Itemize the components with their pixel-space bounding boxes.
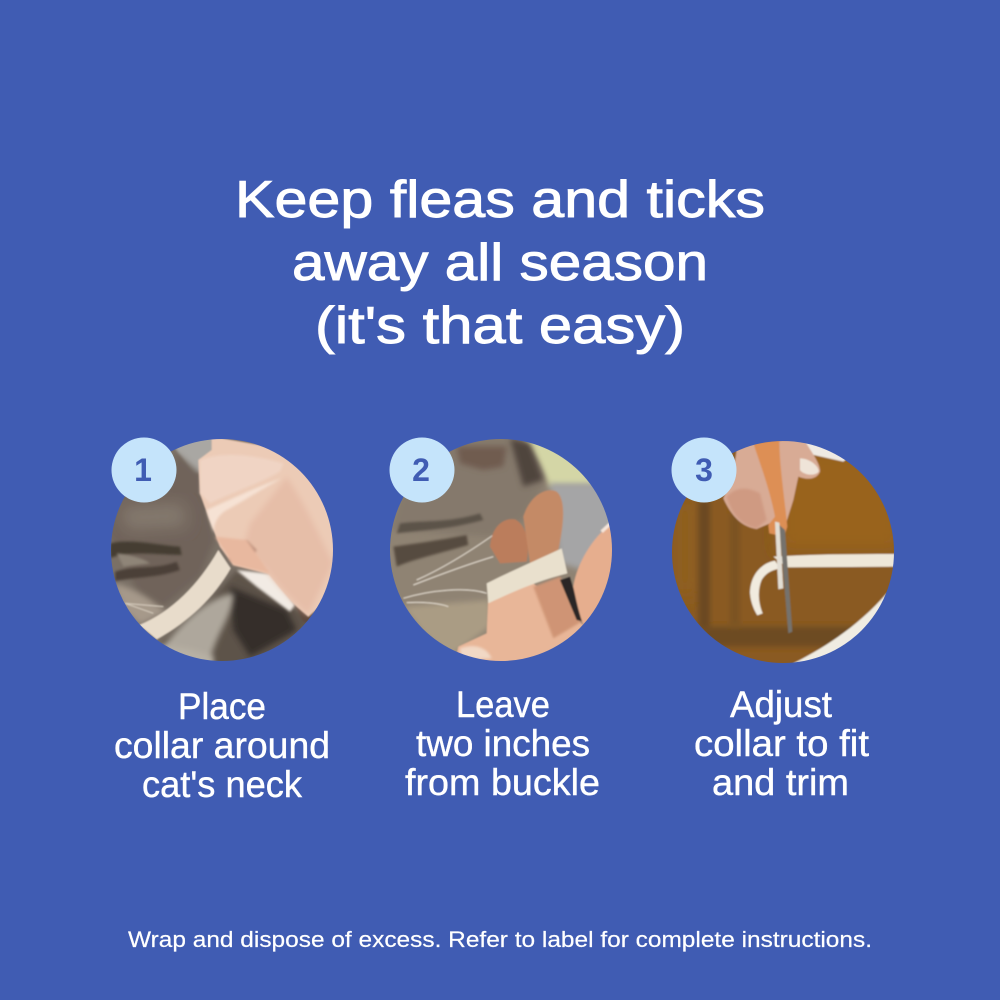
hand: [723, 438, 820, 529]
collar: [139, 550, 231, 639]
hand: [198, 437, 347, 617]
right finger: [572, 526, 612, 625]
scissors: [753, 440, 787, 537]
step 3 caption: Adjust: [730, 684, 833, 725]
black buckle: [560, 577, 583, 622]
title: (it's that easy): [315, 297, 685, 355]
badge 2: 2: [412, 452, 430, 488]
step 2 caption: two inches: [416, 723, 590, 764]
title: Keep fleas and ticks: [235, 171, 765, 229]
badge 2: [390, 438, 454, 502]
step 3 photo: scissors trimming collar: [672, 441, 894, 663]
step 1 photo: hand placing collar on cat: [111, 439, 333, 661]
step 1 caption: Place: [178, 686, 266, 727]
fingers: [490, 519, 528, 563]
title: away all season: [292, 234, 708, 292]
step 1 caption: collar around: [114, 725, 330, 766]
step 3 caption: collar to fit: [694, 723, 870, 764]
title: [235, 171, 765, 355]
badge 3: 3: [695, 452, 713, 488]
step 2 photo: fingers checking collar gap: [390, 439, 612, 661]
step 1 caption: cat's neck: [142, 764, 302, 805]
footer note: Wrap and dispose of excess. Refer to label for complete instructions.: [128, 927, 872, 952]
badge 3: [672, 438, 736, 502]
collar: [487, 548, 567, 603]
lower palm: [456, 583, 584, 661]
collar band: [773, 554, 900, 567]
step 2 caption: Leave: [456, 684, 550, 725]
step 2 caption: from buckle: [405, 762, 600, 803]
badge 1: [112, 438, 176, 502]
step 3 caption: [694, 684, 870, 803]
whiskers: [403, 535, 493, 607]
badge 1: 1: [134, 452, 152, 488]
step 3 caption: and trim: [712, 762, 849, 803]
step 1 caption: [114, 686, 330, 805]
step 2 caption: [405, 684, 600, 803]
window-frame highlights: [805, 443, 846, 463]
